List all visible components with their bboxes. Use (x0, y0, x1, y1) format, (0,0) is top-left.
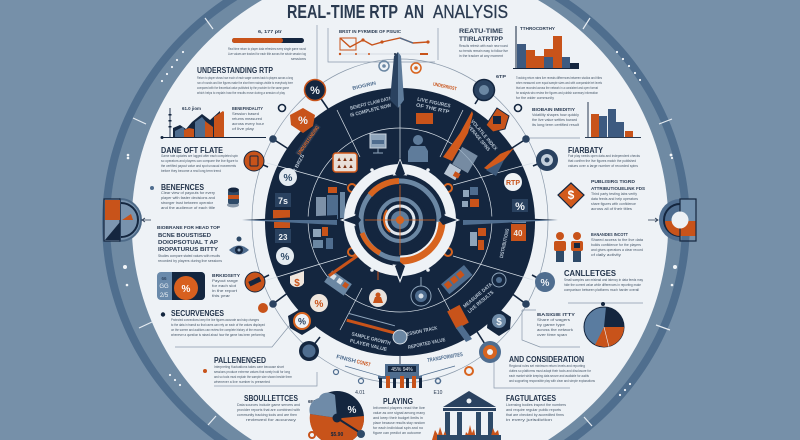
text block: sbouillettces: provider reports that are combined with (237, 408, 300, 412)
text block: 6TP: that are recorded across the network in a consistent and open format (516, 86, 599, 90)
wheel icon: data grid (444, 147, 479, 207)
text block: top percent: BIOBRANE FOR HEAD TOP (157, 225, 220, 230)
text block: sbouillettces: reviewed for accuracy (246, 418, 296, 422)
text block: dane oft flate: so operators and players can compare the live figure to (161, 159, 238, 163)
wheel icon: ring node right (492, 273, 506, 287)
text block: considerations: Regional rules set minimum return levels and reporting (509, 364, 585, 368)
wheel text: MEASURE DATA (462, 282, 494, 310)
connector nodes: lower right (436, 272, 555, 384)
text block: playing: Informed players read the live (373, 406, 425, 410)
text block: publishing: Third party testing labs verify (591, 192, 637, 196)
text block: basigie itty: Share of wagers (537, 318, 570, 322)
text block: basigie itty: across the network (537, 328, 573, 332)
text block: fiarbaty: that confirm the live figures match the published (568, 159, 636, 163)
connector nodes: upper centre: UNDERRIGST (432, 82, 457, 92)
wheel icon: percent circle left (279, 168, 297, 186)
pie chart: bottom: % (348, 405, 357, 416)
text block: considerations: duties so platforms must adapt their tools and disclosure for (509, 369, 592, 373)
text block: 6TP: for the wider community (516, 96, 554, 100)
text block: fiarbaty: Fair play needs open data and independent checks (568, 154, 640, 158)
text block: challenges left: and so tools must explain the sample size shown beside them (214, 375, 292, 379)
panel: top right heading: REATU-TIME (459, 29, 503, 35)
heading: understanding RTP: run of rounds and live figures make the short term swings visible to everybody here (197, 81, 293, 85)
text block: basigie itty (537, 312, 575, 337)
icon: dollar hexagon (558, 183, 584, 208)
text block: security: SECURVENGES (171, 309, 225, 318)
right gauge emblem (648, 199, 696, 241)
percent panel (157, 272, 205, 300)
text block: challenges left: sessions produce extreme values that rarely hold for long (214, 370, 290, 374)
text block: considerations (509, 355, 595, 383)
heading: understanding RTP: which helps to explain how the results move during a session of play (197, 91, 285, 95)
connector nodes: upper right (474, 80, 558, 171)
wheel icon: stamp circle: RTP (506, 180, 520, 187)
title: REAL-TIME RTP (287, 2, 398, 22)
text block: playing: and keep their budget limits in (373, 416, 423, 420)
text block: sbouillettces: community tracking tools and are then (237, 413, 297, 417)
wheel icon: dollar tag: $ (294, 278, 300, 289)
wheel icon: slot machine box: ▲▲▲ (336, 157, 354, 163)
text block: bananas incott: and gives operators a clear record (591, 248, 643, 252)
wheel node bottom (393, 330, 407, 344)
long horizontal needles (242, 215, 558, 225)
outer dial ring (102, 0, 690, 440)
wheel icon: percent right: % (515, 201, 525, 213)
bar chart: top right: TTHROCDRTHY (520, 26, 555, 31)
wheel icon: orange note (447, 305, 472, 342)
top needle (390, 52, 404, 108)
connector node: percent circle (304, 80, 337, 122)
icon: coin stack (227, 188, 239, 208)
text block: bananas incott: BANANDES INCOTT (591, 232, 628, 237)
wheel icon: slot machine box (333, 153, 357, 172)
icon: bank building (432, 391, 501, 440)
text block: bananas incott: builds confidence for the players (591, 243, 641, 247)
wheel icon: person (408, 135, 428, 162)
wheel icon: orange label top left (295, 124, 322, 157)
connector nodes: lower right: % (541, 278, 550, 289)
panel: progress stat (228, 29, 306, 61)
wheel icon: tiles right (441, 228, 486, 294)
wheel text: LIVE RESULTS (467, 289, 496, 315)
text block: brkidsiity (212, 273, 240, 298)
wheel text: VOLATILE INDEX (469, 119, 499, 152)
text block: publishing: ATTRIBUTIOUELINK FDS (591, 186, 645, 191)
text block: benefits (150, 183, 215, 210)
pie chart: bottom (308, 391, 365, 440)
text block: benefits: stronger trust between operator (161, 201, 214, 205)
text block: regulations (506, 394, 566, 422)
text block: publishing: PUBLISIRG TIGRD (591, 179, 636, 184)
wheel icon: stacked tiles left (316, 187, 345, 219)
wheel text: CR BRZS (290, 153, 306, 177)
wheel text: SAMPLE GROWTH (351, 331, 391, 347)
connector nodes: upper left (244, 104, 290, 171)
wheel text (290, 96, 511, 353)
text block: dane oft flate: DANE OFT FLATE (161, 146, 224, 155)
wheel text: BENEFIT CLAIM DATA (350, 96, 392, 112)
text block: 6TP: when measured over equal sample sizes and with comparable bet levels (516, 81, 602, 85)
wheel ring lines (264, 88, 536, 330)
wheel icon: tile 23: 23 (279, 233, 288, 242)
thin frame lines (175, 25, 643, 388)
text block: top percent: recorded by players during live sessions (158, 259, 222, 263)
text block: challenges: CANLLETGES (564, 269, 617, 278)
wheel icon: dollar tag (290, 271, 304, 289)
wheel icon: stamp circle (504, 173, 522, 191)
pie chart: right (584, 302, 624, 347)
wheel text: DISTRIBUTIONS (499, 228, 511, 259)
text block: playing: place because results stay random (373, 421, 425, 425)
text block: challenges: hide the current value while differences in reporting make (564, 283, 641, 287)
text block: regulations: in every jurisdiction (506, 418, 552, 422)
wheel text: IS COMPLETE NOW (350, 103, 392, 119)
text block: fiarbaty (568, 146, 640, 168)
percent panel: GG (159, 284, 169, 290)
panel: line chart (339, 29, 430, 55)
text block: brkidsiity: BRKIDSIITY (212, 273, 240, 278)
wheel text: SESSION TRACK (404, 325, 438, 338)
wheel icon: orange box right: 40 (514, 229, 523, 238)
text block: benefindality: BENEFINDALITY (232, 106, 263, 111)
text block: basigie itty: by game type (537, 323, 565, 327)
text block and bar chart: mid right (532, 102, 641, 138)
text block: bananas incott: of daily activity (591, 253, 621, 257)
text block: challenges: comparison between platforms much harder overall (564, 288, 639, 292)
text block: publishing: share figures with confidence (591, 202, 636, 206)
text block and bar chart: mid right: its long term certified result (532, 123, 580, 127)
title: AN (404, 2, 424, 22)
text block: top percent: Studies compare stated values with results (158, 254, 220, 258)
connector nodes: lower left: % (298, 316, 306, 326)
text block: playing: value as one signal among many (373, 411, 425, 415)
icon: dollar hexagon: $ (568, 188, 575, 202)
area chart (160, 106, 266, 139)
bottom labels on arc: TRANSFORMITIES (427, 352, 464, 364)
bottom stat panel with figures (378, 355, 422, 388)
text block: considerations: AND CONSIDERATION (509, 355, 584, 364)
text block: bananas incott (591, 232, 644, 257)
text block: considerations: and supporting responsible play with clear and simple explanations (509, 379, 595, 383)
left gauge emblem (104, 199, 151, 241)
bottom labels on arc (334, 352, 464, 396)
text block: 6TP: 6TP (496, 74, 506, 79)
text block: security: on the screen and auditors can review the complete history of the records (171, 328, 263, 332)
text block: brkidsiity: this year (212, 294, 231, 298)
text block: brkidsiity: Payout range (212, 279, 238, 283)
text block: challenges left: Interpreting fluctuations takes care because short (214, 365, 285, 369)
text block: benefits: player with faster decisions and (161, 196, 215, 200)
text block: challenges left: whenever a live number is presented (214, 380, 270, 384)
text block and bar chart: mid right: BIOBAIN IMEDITIY (532, 107, 575, 112)
text block: basigie itty: over time span (537, 333, 567, 337)
text block: 6TP (496, 74, 602, 100)
text block: security (161, 309, 265, 337)
panel: progress stat: sessions (291, 57, 306, 61)
wheel icon: percent circle bottom (310, 294, 328, 312)
text block: brkidsiity: for each slot (212, 284, 237, 288)
panel: top right heading: in the tracker at any moment (459, 54, 504, 58)
percent panel: % (182, 284, 191, 295)
text block: regulations: and require regular public reports (506, 408, 561, 412)
text block: benefits: BENEFNCES (161, 183, 205, 192)
wheel icon: orange box right (511, 219, 526, 241)
text block: publishing: across all of their titles (591, 207, 632, 211)
wheel icon: orange person (369, 271, 387, 307)
text block: security: Protected connections keep the live figures accurate and stop changes (171, 318, 259, 322)
heading: understanding RTP: UNDERSTANDING RTP (197, 66, 274, 75)
text block: benefindality: Session based (232, 112, 259, 116)
wheel icon: orange needle top right (443, 111, 514, 176)
text block: regulations: FAGTULATGES (506, 394, 557, 403)
text block: sbouillettces: Data sources include game servers and (237, 403, 300, 407)
wheel icon: tile 7s: 7s (278, 196, 288, 206)
wheel icon: tile 23 (274, 222, 291, 243)
text block: playing: figure can predict an outcome (373, 431, 421, 435)
panel: progress stat: Live values are tracked for each title across the whole session log (228, 52, 306, 56)
panel: top right heading: TTIRLATRTPP (459, 37, 503, 43)
wheel icon: blue ring (411, 277, 431, 306)
wheel icon: percent right (512, 199, 528, 213)
text block: benefindality (232, 106, 265, 131)
bottom stat panel with figures: 45% 94% (391, 367, 413, 373)
wheel text: AVERAGE SPINS (465, 123, 491, 153)
heading: understanding RTP: compared with the theoretical value published by the provider for the same game (197, 86, 289, 90)
text block: fiarbaty: values over a large number of recorded spins (568, 164, 638, 168)
text block: benefits: and the audience of each title (161, 206, 215, 210)
text block: top percent: BCNE BOUSTISED (158, 233, 211, 239)
heading: understanding RTP (197, 66, 293, 95)
text block: bananas incott: Shared access to the live data (591, 238, 644, 242)
text block: dane oft flate: before they become a real long term trend (161, 169, 221, 173)
bottom labels on arc: FINISH (336, 354, 356, 365)
wheel icon: tiles lower left (313, 227, 362, 296)
title: ANALYSIS (433, 2, 508, 22)
text block: sbouillettces: SBOULLETTCES (244, 394, 299, 403)
text block: basigie itty: BASIGIE ITTY (537, 312, 575, 317)
percent panel: 66 (161, 276, 167, 281)
wheel icon: slot machine box: ▲▲▲ (336, 164, 354, 170)
text block: top percent: IROPATURUS BITTY (158, 247, 218, 253)
text block: top percent (157, 225, 222, 263)
connector node: orange hexagon percent (290, 108, 315, 133)
panel: progress stat: Real time return to player data refreshes every single game round (228, 47, 306, 51)
wheel text: REPORTED VALUE (408, 337, 447, 351)
text block: publishing (591, 179, 645, 211)
center compass emblem (340, 158, 460, 283)
bar chart: top right (513, 26, 579, 69)
text block: dane oft flate: Game rate updates are logged after each completed spin (161, 154, 238, 158)
icon: people (554, 232, 583, 262)
text block: dane oft flate (161, 146, 238, 173)
text block: regulations: that are checked by accredited firms (506, 413, 564, 417)
text block: benefindality: of live play (232, 127, 254, 131)
heading: understanding RTP: Return to player shows how much of each wager comes back to players across a long (197, 76, 293, 80)
wheel text: LIVE FIGURES (417, 97, 452, 110)
text block: 6TP: for analysts who review the figures and publish summary information (516, 91, 598, 95)
text block: security: to the data in transit so that users can rely on each of the values displayed (171, 323, 265, 327)
wheel icon: percent circle left: % (284, 173, 293, 184)
connector node: orange hexagon percent: % (298, 115, 308, 127)
pie chart: bottom: 6ET (308, 399, 316, 404)
icon: eye (229, 236, 249, 254)
text block: fiarbaty: FIARBATY (568, 146, 604, 155)
bottom labels on arc: CONST (356, 359, 371, 369)
text block: challenges: Small samples can mislead and latency in data feeds may (564, 278, 643, 282)
text block: 6TP: Tracking return rates live reveals differences between studios and titles (516, 76, 602, 80)
wheel icon: orange box top (416, 113, 433, 124)
text block: playing: PLAYING (383, 397, 413, 406)
connector nodes: lower left (245, 272, 320, 361)
text block: publishing: data feeds and help operators (591, 197, 638, 201)
connector nodes: lower right: $ (496, 317, 502, 328)
bottom labels on arc: E10 (434, 390, 443, 396)
panel: top right heading: so trends remain easy to follow live (459, 49, 508, 53)
text block: security: whenever a question is raised about how the game has been performing (171, 333, 265, 337)
text block and bar chart: mid right: the live value settles toward (532, 118, 577, 122)
text block: regulations: Licensing bodies inspect the numbers (506, 403, 566, 407)
text block and bar chart: mid right: Volatility shapes how quickly (532, 113, 579, 117)
wheel (264, 88, 536, 356)
connector node: percent circle: % (310, 85, 320, 97)
text block: dane oft flate: the certified payout value and spot unusual movements (161, 164, 236, 168)
text block: benefits: Clear view of payouts for every (161, 191, 215, 195)
panel: line chart: BRST IN PYRMIDE OF PSIUIC (339, 29, 402, 34)
text block: challenges left: PALLENENGED (214, 356, 266, 365)
text block: sbouillettces (237, 394, 300, 422)
percent panel: 2/5 (160, 293, 169, 299)
connector nodes: upper centre (352, 61, 457, 92)
wheel icon: orange strip bottom (346, 313, 395, 335)
text block: challenges left (203, 356, 292, 384)
text block: benefindality: across every hour (232, 122, 265, 126)
title (287, 2, 508, 22)
pie chart: bottom: $5.90 (331, 432, 343, 438)
wheel icon: tile 7s (273, 193, 291, 220)
text block: brkidsiity: in the report (212, 289, 238, 293)
wheel icon: percent circle lower left (276, 247, 294, 265)
text block: considerations: each market while keeping data secure and available for audits (509, 374, 589, 378)
text block: challenges (564, 269, 643, 292)
connector nodes: upper centre: BIOGRIN (352, 80, 377, 92)
wheel icon: orange label top left: UNDERSTANDING (297, 125, 321, 156)
wheel text: PLAYER VALUE (349, 338, 388, 353)
text block: playing: for each individual spin and no (373, 426, 423, 430)
area chart: 61.0 jiom (182, 106, 201, 111)
panel: progress stat: 6, 177 ptr (258, 29, 282, 34)
text block: top percent: DOIOPSOTUAL T AP (158, 240, 218, 246)
panel: top right heading: Results refresh with each new round (459, 44, 508, 48)
wheel icon: percent circle bottom: % (315, 299, 324, 310)
wheel icon: percent circle lower left: % (281, 252, 290, 263)
wheel icon: monitor (370, 134, 386, 153)
wheel text: OF THE RTP (415, 102, 451, 116)
bottom labels on arc: 4.01 (355, 390, 365, 396)
panel: top right heading (459, 29, 508, 58)
text block: benefindality: returns measured (232, 117, 262, 121)
text block: playing (373, 397, 425, 435)
